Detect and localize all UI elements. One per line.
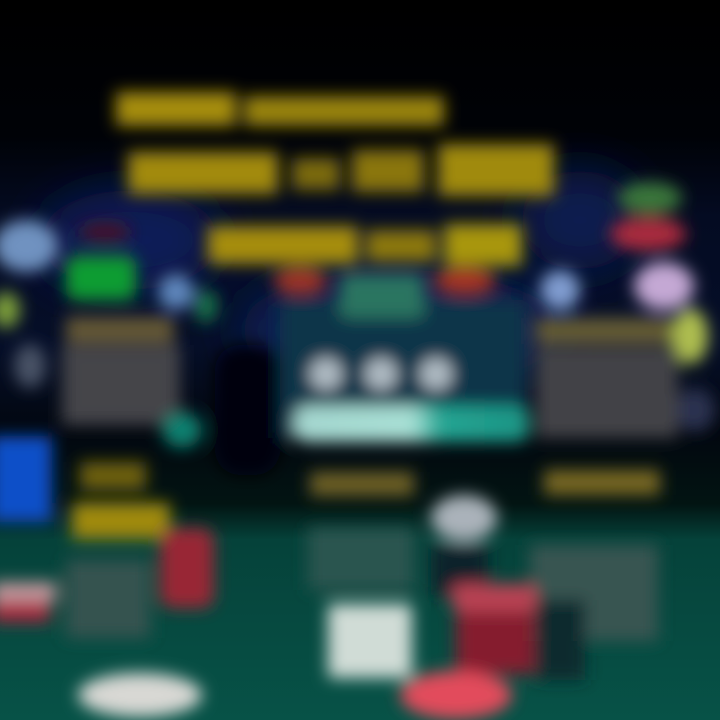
figure: dark silhouette bbox=[215, 345, 280, 475]
center card body bbox=[280, 300, 526, 438]
icon: red and white chip far left bbox=[0, 582, 56, 622]
icon: red chip bottom bbox=[400, 671, 512, 719]
icon: small teal accent bbox=[162, 412, 202, 448]
bottom left text block bbox=[66, 560, 150, 638]
bottom center heading bbox=[310, 472, 414, 496]
bottom right text block bbox=[530, 545, 658, 641]
center card top icons bbox=[273, 268, 496, 318]
panel: bottom left column bbox=[66, 462, 170, 638]
panel: left card bbox=[62, 317, 180, 425]
bottom right heading bbox=[544, 470, 660, 495]
icon: red chip stack right bbox=[452, 584, 536, 674]
center card button bbox=[295, 406, 529, 442]
bottom left heading bbox=[72, 462, 170, 539]
right decoration icons bbox=[540, 182, 715, 432]
icon: dark chip stack right bbox=[535, 600, 585, 680]
bottom center text block bbox=[308, 528, 414, 590]
panel: right card bbox=[536, 318, 678, 438]
panel: bottom right column bbox=[530, 470, 660, 641]
center card dots bbox=[310, 358, 452, 390]
title block bbox=[116, 92, 554, 266]
icon: playing card bbox=[328, 604, 412, 678]
icon: white chip bottom bbox=[78, 673, 202, 717]
panel: bottom center column bbox=[308, 472, 414, 590]
icon: dark chip stack bbox=[432, 545, 488, 595]
icon: white chip center bbox=[431, 495, 497, 541]
icon: bright blue square bbox=[0, 436, 52, 522]
panel: center card bbox=[273, 268, 529, 442]
icon: red chip stack left bbox=[160, 528, 214, 608]
left decoration icons bbox=[0, 220, 218, 388]
background: blue room glow bbox=[40, 170, 640, 390]
